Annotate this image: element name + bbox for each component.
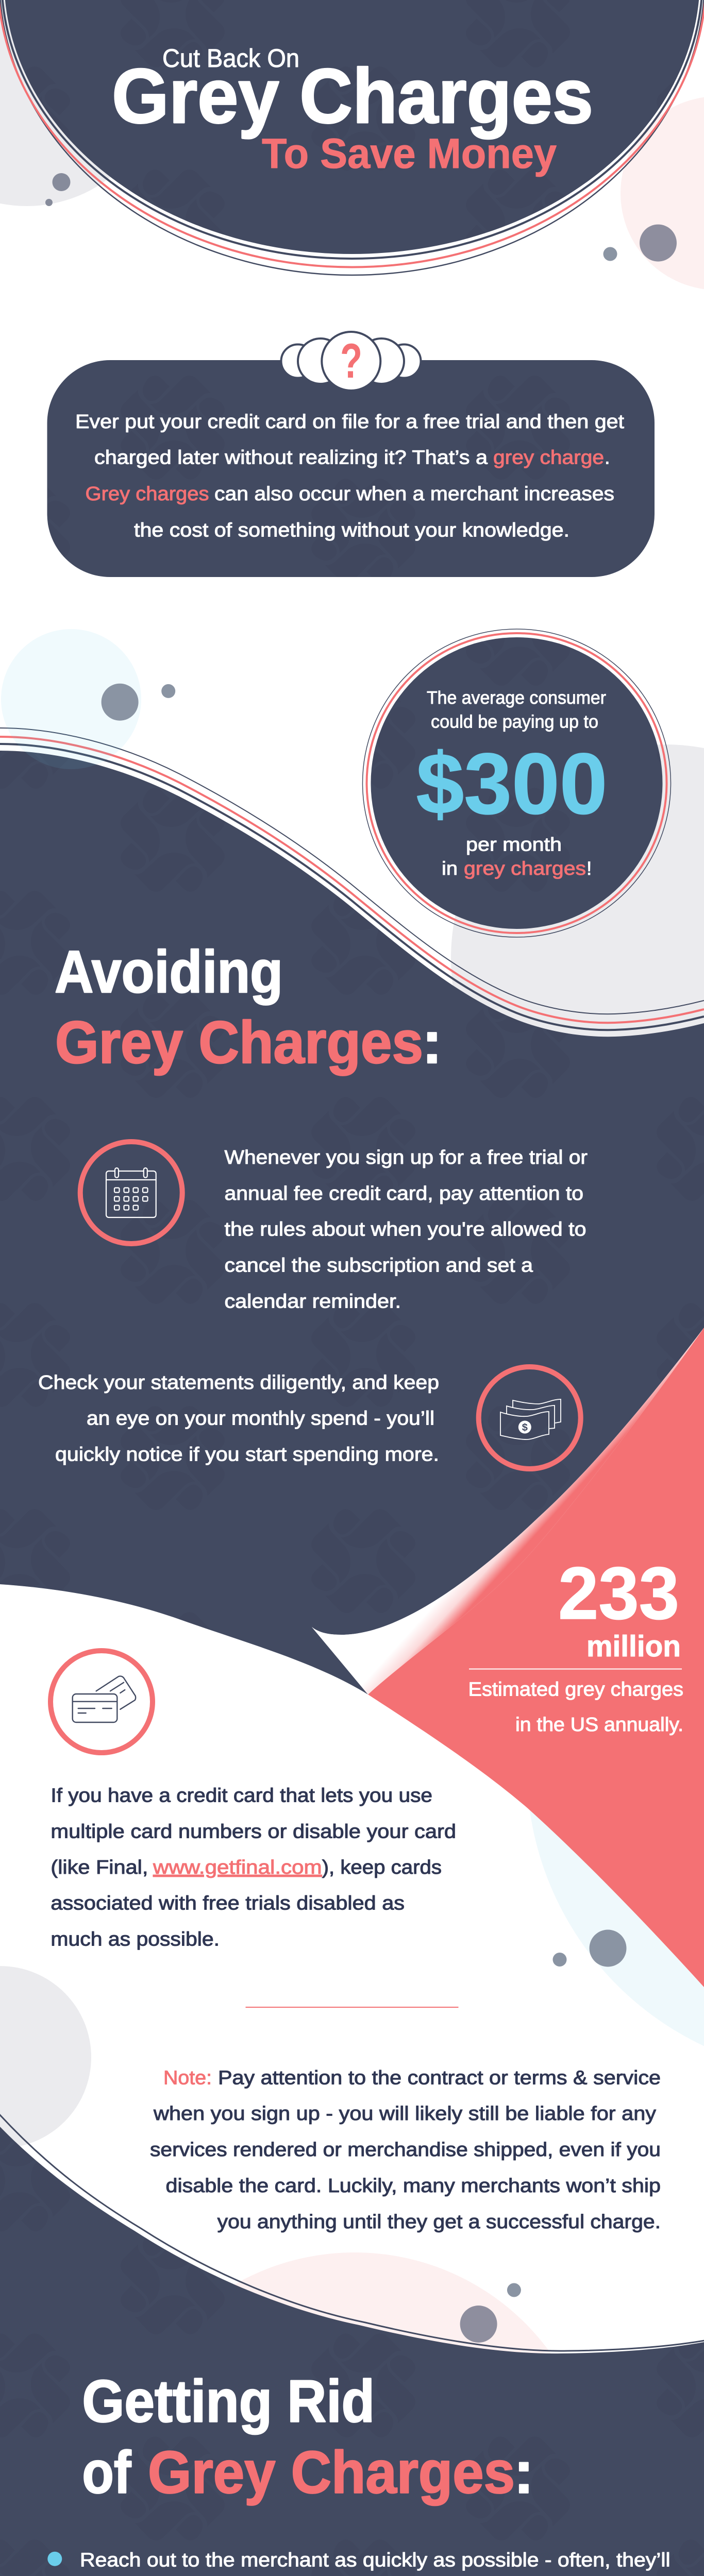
icon: calendar [80,1142,182,1244]
bullet: reach out to merchant: Reach out to the merchant as quickly as possible - often, they’ll [80,2549,671,2571]
stat: 233 million: in the US annually. [515,1714,683,1736]
panel: header dome [0,0,704,275]
tip text: free trial reminder [225,1147,588,1312]
tip text: free trial reminder: Whenever you sign up for a free trial or [225,1147,588,1168]
stat circle: $300: could be paying up to [431,712,598,732]
note text: Note: [163,2067,212,2089]
note text [150,2067,661,2233]
coral corner [368,1328,704,1987]
intro text: Grey charges [86,483,209,505]
tip text: disable card: associated with free trials disabled as [51,1893,405,1914]
stat circle: $300: per month [466,834,562,855]
dome fill [4,0,700,254]
panel: getting rid of grey charges [0,2114,704,2576]
header dots [45,173,677,262]
icon: question mark circles [281,332,421,391]
heading: avoiding grey charges: Grey Charges [55,1009,423,1076]
dome watermark [4,0,700,254]
tip text: check statements: quickly notice if you start spending more. [55,1444,439,1465]
note text: services rendered or merchandise shipped, even if you [150,2139,661,2161]
tip text: check statements: an eye on your monthly spend - you’ll [87,1408,434,1430]
lower section watermark [0,2127,704,2576]
title: Cut Back On [162,44,299,73]
stat circle: $300: The average consumer [427,688,606,708]
intro text: the cost of something without your knowledge. [134,519,569,541]
dark wave section [0,751,704,1694]
heading: getting rid [82,2368,534,2505]
title [112,44,593,177]
tip text: free trial reminder: calendar reminder. [225,1291,401,1312]
note text: you anything until they get a successful charge. [217,2211,661,2233]
stat circle: $300: in [442,858,458,879]
page peel [312,1328,704,1694]
top rim line [0,2114,704,2351]
stat circle: $300 [363,629,671,937]
mid-page dots [552,1930,627,1967]
heading: getting rid: : [514,2438,534,2505]
title: To Save Money [262,130,557,177]
note text: disable the card. Luckily, many merchants won’t ship [166,2175,661,2197]
tip text: disable card: (like Final, [51,1857,148,1878]
stat circle: $300: ! [586,858,592,879]
heading: getting rid: of [82,2438,131,2505]
icon: question mark circles: ? [340,334,362,388]
panel: avoiding grey charges background [0,728,704,1987]
stat circle: $300: grey charges [464,858,586,879]
icon: money bills: $ [522,1422,528,1433]
intro text: charged later without realizing it? That’s a [94,447,488,469]
tip text: free trial reminder: the rules about when you're allowed to [225,1219,586,1241]
lower dots [60,2283,664,2576]
intro text: . [605,447,610,469]
heading: avoiding grey charges [55,938,442,1076]
callout box [47,360,655,577]
intro text [75,411,624,541]
tip text: disable card: ), keep cards [322,1857,442,1878]
callout watermark [47,360,655,577]
tip text: disable card [51,1785,456,1950]
dark wave watermark [0,751,704,1694]
tip text: disable card: multiple card numbers or disable your card [51,1821,456,1842]
tip text: free trial reminder: cancel the subscription and set a [225,1255,533,1277]
stat: 233 million: million [586,1630,681,1663]
icon: money bills [479,1367,581,1469]
dark lower section [0,2127,704,2576]
note text: Pay attention to the contract or terms & service [218,2067,661,2089]
wave rim lines [0,728,704,1030]
panel: intro callout [47,332,655,577]
tip text: check statements: Check your statements diligently, and keep [38,1372,439,1394]
heading: avoiding grey charges: : [422,1009,442,1076]
light blue circle and dots [1,629,175,769]
intro text: grey charge [493,447,604,469]
tip text: disable card: If you have a credit card that lets you use [51,1785,432,1807]
icon: credit cards [51,1651,153,1753]
tip text: free trial reminder: annual fee credit card, pay attention to [225,1183,583,1205]
stat: 233 million [468,1552,683,1736]
stat: 233 million: Estimated grey charges [468,1679,683,1700]
intro text: Ever put your credit card on file for a free trial and then get [75,411,624,433]
heading: avoiding grey charges: Avoiding [55,938,283,1005]
dome rim lines [0,0,704,275]
intro text: can also occur when a merchant increases [214,483,614,505]
heading: getting rid: Getting Rid [82,2368,375,2435]
tip text: disable card: much as possible. [51,1928,220,1950]
tip text: check statements [38,1372,439,1465]
note text: when you sign up - you will likely still be liable for any [153,2103,656,2125]
stat circle: $300: $300 [416,735,607,832]
title: Grey Charges [112,53,593,139]
heading: getting rid: Grey Charges [148,2438,515,2505]
tip text: disable card: www.getfinal.com [153,1857,322,1878]
stat: 233 million: 233 [558,1552,679,1635]
coral divider [245,2007,459,2008]
